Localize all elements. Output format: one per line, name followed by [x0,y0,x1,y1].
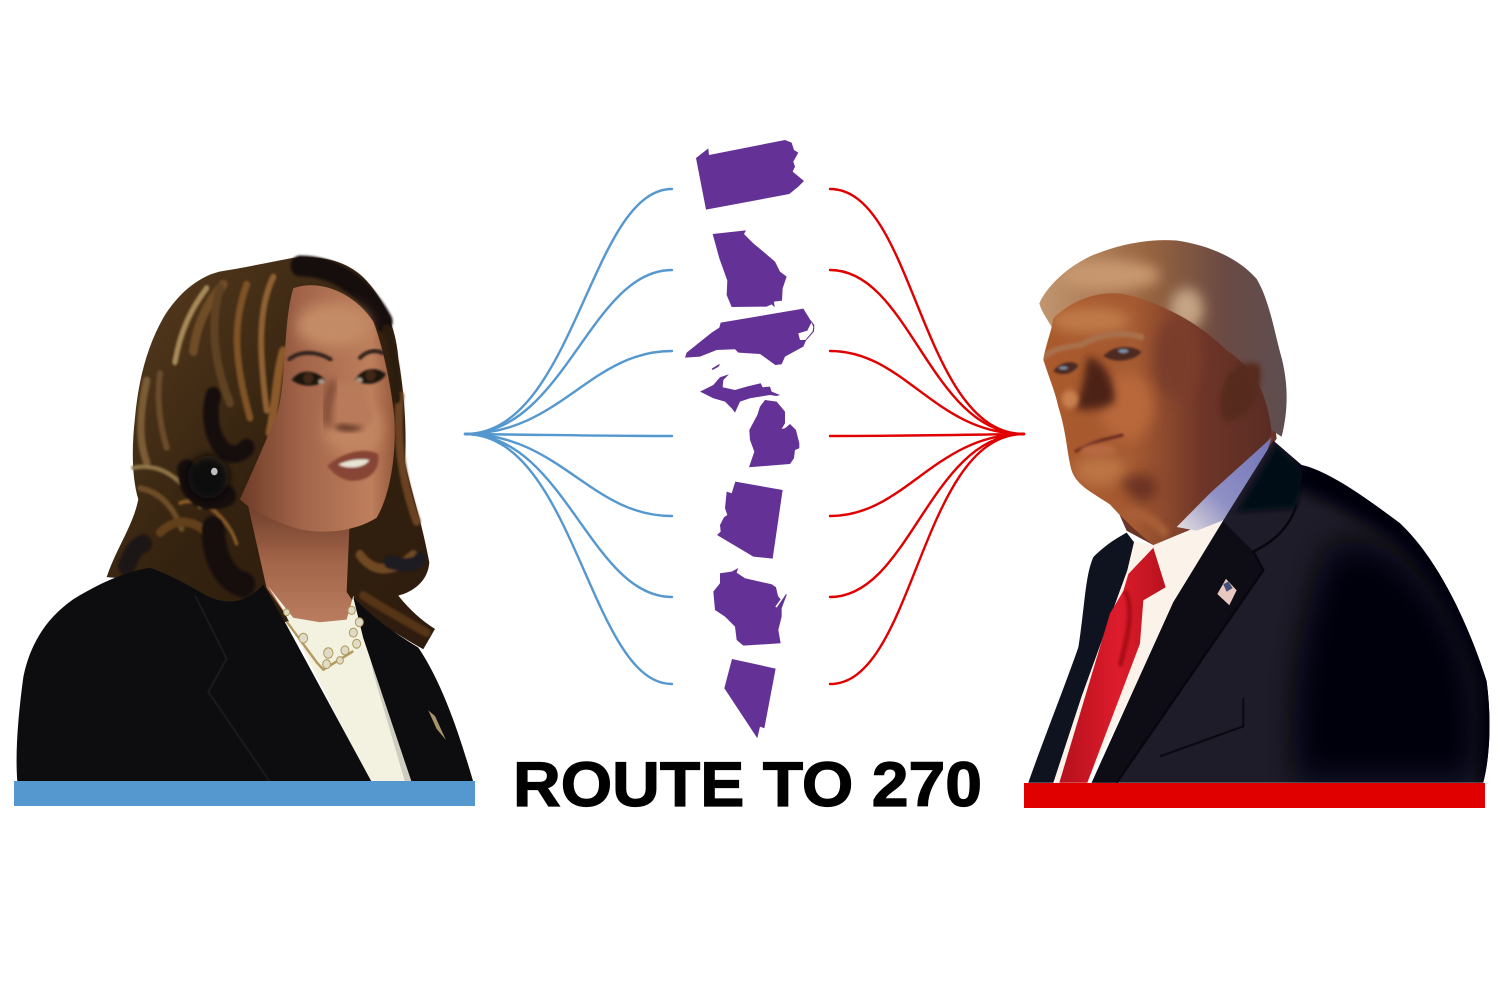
state: North Carolina [685,309,814,365]
nose shadow [1075,358,1115,410]
face [240,285,395,532]
blue route lines [465,189,672,684]
neck and head base [1110,328,1277,545]
hair [1039,240,1287,437]
earring [188,456,229,499]
blue-shadowed collar [1177,438,1272,531]
forehead shading [1050,307,1130,333]
line to Nevada [465,434,672,684]
lower lip [1080,445,1117,455]
nose [331,381,374,430]
lapel outline [1117,504,1297,783]
necktie [1059,548,1166,783]
infographic canvas [14,140,1490,808]
hair back [107,257,435,649]
line from Nevada [830,434,1024,684]
facial shading [1043,307,1200,535]
state: Pennsylvania [696,140,804,210]
shoulder edge shadow [1297,471,1493,783]
neck creases [1123,514,1167,535]
line to Wisconsin [465,434,672,597]
cheek light [1100,373,1153,441]
portrait: Kamala Harris [17,257,473,782]
under-jaw shadow [1120,474,1157,502]
blue base bar [14,781,475,806]
eye glint right [1118,349,1129,353]
temple shadow [1150,316,1186,395]
red route lines [830,189,1024,684]
hair strands [127,266,427,633]
cheek light [323,403,383,455]
state: Georgia [713,230,787,307]
white blouse [268,586,413,782]
hair highlight [1170,288,1203,330]
jacket left side [1028,533,1134,783]
line from Michigan [830,434,1024,436]
hair shading [1060,260,1203,330]
pearl necklace [284,606,363,670]
line from Arizona [830,434,1024,516]
line from North Carolina [830,351,1024,434]
mouth [327,451,378,481]
line from Wisconsin [830,434,1024,597]
jacket body [1092,441,1490,783]
eyebrow [1043,334,1142,358]
lapel pin [428,710,446,740]
nose light [1062,390,1078,408]
line to North Carolina [465,351,672,434]
swing state maps [685,140,814,738]
neck [247,499,357,627]
jacket shading [1237,444,1493,783]
blazer [17,568,473,782]
ear [1220,363,1261,422]
lapel dark band [1092,521,1263,783]
line to Michigan [465,434,672,436]
face [1043,293,1272,545]
eye socket right [1103,347,1142,361]
state: Nevada [724,659,776,738]
forehead light [297,303,370,347]
hair sheen [1060,260,1160,290]
eye glints [1059,366,1068,370]
red base bar [1024,783,1485,808]
flag pin [1217,579,1237,605]
line to Georgia [465,270,672,434]
eye socket left [1053,362,1078,374]
jaw light [1073,456,1127,486]
lapel shading [195,596,270,782]
state: Wisconsin [713,568,787,646]
white shirt [1053,520,1223,783]
line to Pennsylvania [465,189,672,434]
portrait: Donald Trump [1028,240,1493,783]
pocket [1160,698,1243,756]
jacket deep shadow [1294,542,1478,783]
line to Arizona [465,434,672,516]
line from Georgia [830,270,1024,434]
title: ROUTE TO 270 [513,750,982,820]
tie shadow fold [1120,591,1130,666]
eyebrows [289,351,383,359]
blouse shadow [365,633,415,782]
nose underside [333,425,365,431]
line from Pennsylvania [830,189,1024,434]
eyes [292,369,386,386]
state: Michigan [700,364,799,467]
mouth [1075,435,1123,452]
collar shadow [1237,444,1303,512]
state: Arizona [717,482,783,559]
nose side shadow [327,381,333,427]
